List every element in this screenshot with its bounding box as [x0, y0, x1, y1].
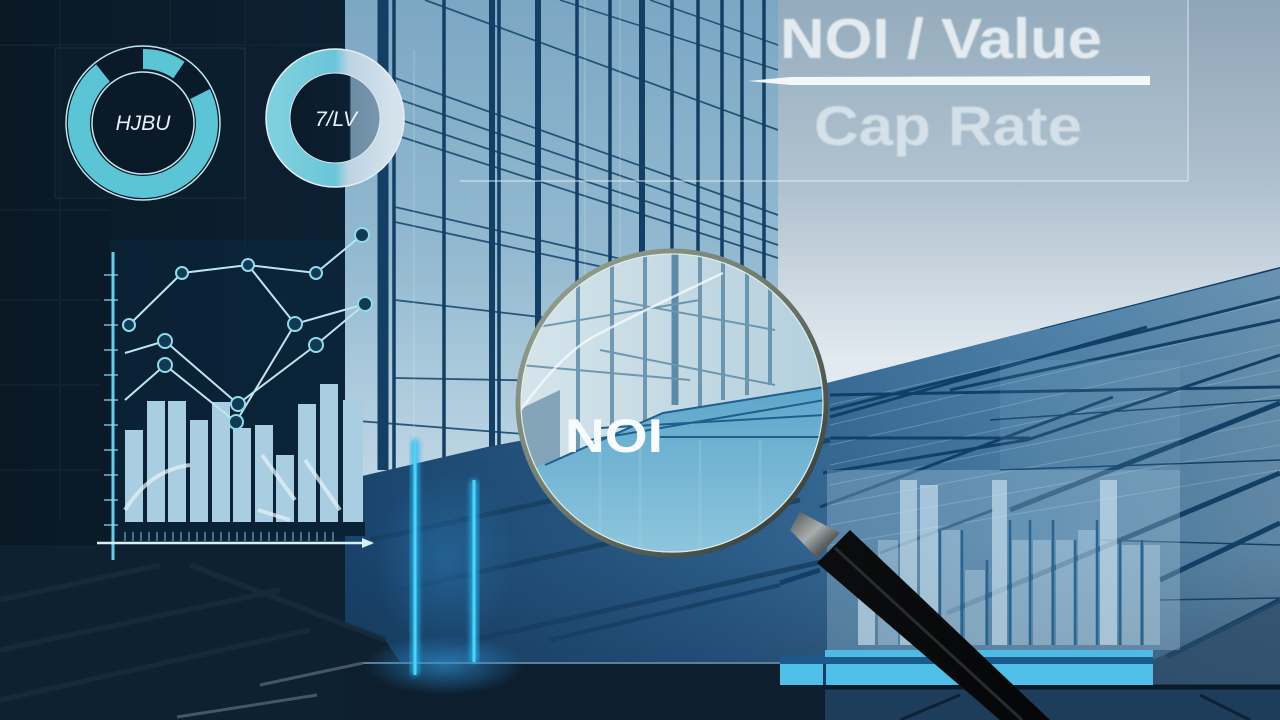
axes [112, 252, 114, 560]
points [123, 228, 372, 429]
lines [125, 235, 365, 422]
gauge left [66, 46, 220, 200]
thin roof courses [830, 300, 1280, 545]
dark foreground [0, 545, 1280, 720]
handle [790, 512, 1050, 720]
line and bar chart [97, 228, 374, 560]
gauge left: HJBU [116, 112, 171, 135]
formula panel [460, 0, 1188, 181]
glass tower [345, 0, 778, 500]
right translucent bar chart panel [780, 360, 1180, 685]
gauge right: 7/LV [315, 108, 359, 131]
formula: Cap Rate: Cap Rate [814, 94, 1082, 157]
glowing vertical beams [365, 440, 525, 695]
dashboard panel: gauges [55, 46, 404, 200]
magnifying glass [517, 250, 1050, 720]
lens [520, 253, 824, 553]
bars [125, 384, 363, 522]
divider bar [748, 76, 1150, 85]
gauge right [266, 49, 404, 187]
left dark building [0, 0, 346, 720]
formula: NOI / Value: NOI / Value [780, 7, 1102, 71]
lens label: NOI [565, 409, 663, 462]
